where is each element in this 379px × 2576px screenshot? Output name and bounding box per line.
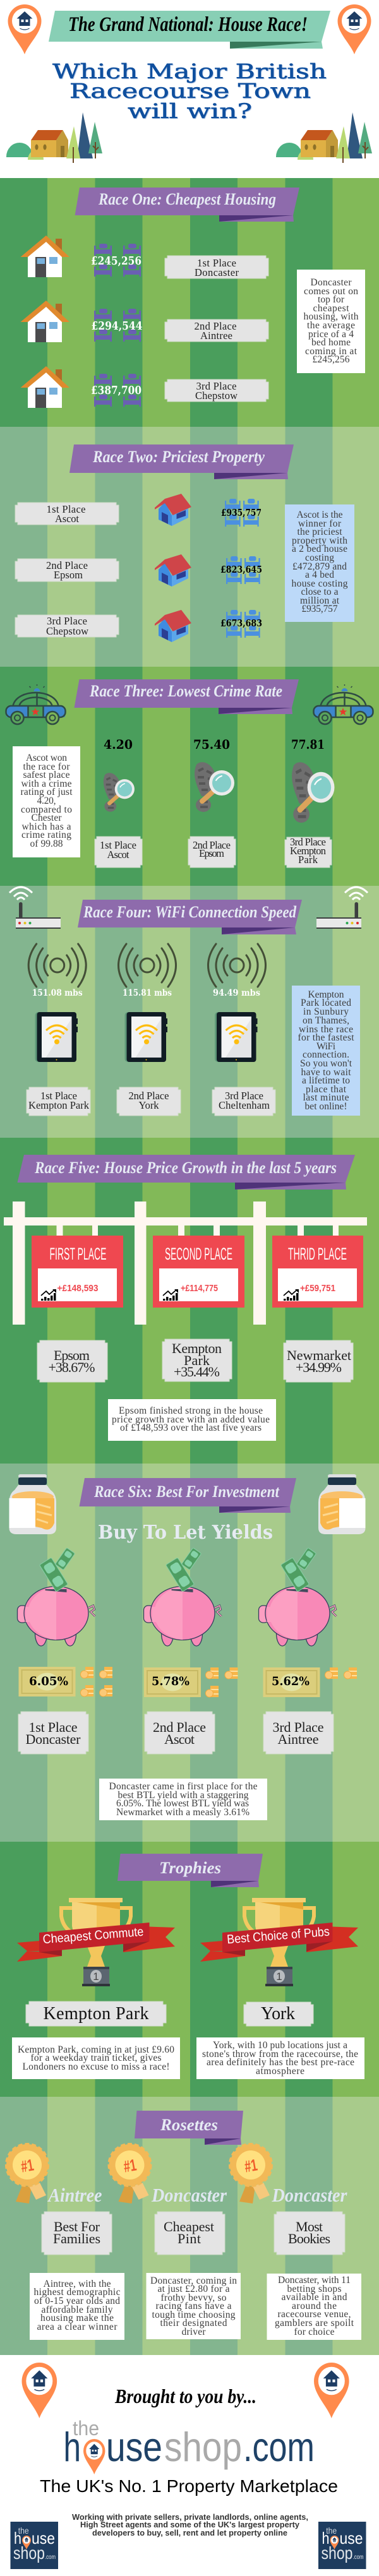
label: 2nd place Ascot: Ascot <box>164 1731 195 1747</box>
speed 2: 115.81 mbs <box>123 988 172 998</box>
icon: house 2 <box>20 301 69 342</box>
label: cheapest pint <box>155 2212 225 2255</box>
callout: Kempton Park: last minute <box>303 1092 349 1103</box>
callout: Kempton Park: on Thames, <box>303 1015 349 1026</box>
callout: Aintree <box>30 2273 124 2340</box>
banner: rosettes <box>135 2111 243 2145</box>
beds and price 3 <box>91 374 141 407</box>
rosette: Doncaster pint <box>109 2144 227 2206</box>
icon: left map pin <box>8 4 42 54</box>
callout: Kempton Park: have to wait <box>301 1067 351 1078</box>
callout: Ascot safest: of 99.88 <box>30 838 63 849</box>
label: 2nd place Epsom: Epsom <box>199 847 224 859</box>
callout: Doncaster bookies: gamblers are spoilt <box>275 2318 354 2329</box>
label: 2nd place Epsom <box>188 837 236 868</box>
icon: piggy bank 1 <box>18 1547 95 1646</box>
label: 1st place Doncaster: 1st Place <box>29 1719 77 1735</box>
callout: Kempton Park: connection. <box>303 1049 349 1060</box>
callout: York pubs: atmosphere <box>256 2066 304 2077</box>
beds and price 1: £935,757 <box>221 507 262 518</box>
logo: right square <box>318 2522 366 2569</box>
label: 3rd place Kempton Park: Park <box>298 854 318 866</box>
callout: Doncaster: cheapest <box>313 303 349 314</box>
beds and price 3: £387,700 <box>91 384 141 397</box>
label: 1st place Ascot: 1st Place <box>100 839 136 851</box>
icon: right village <box>276 112 372 163</box>
label: Newmarket: +34.99% <box>296 1359 342 1375</box>
rosette: Doncaster pint: Doncaster <box>151 2184 227 2206</box>
label: 3rd place Cheltenham <box>212 1087 275 1116</box>
callout: Ascot safest: with a crime <box>21 778 72 789</box>
callout: Doncaster yield: best BTL yield with a staggering <box>117 1790 249 1801</box>
label: 3rd place Chepstow: Chepstow <box>46 625 88 637</box>
yield 1: 6.05% <box>29 1674 68 1688</box>
icon: right router <box>316 887 368 929</box>
label: Kempton Park: Kempton Park <box>43 2004 149 2024</box>
callout: Ascot: costing <box>305 552 334 563</box>
panel: race three lowest crime rate <box>0 667 379 886</box>
banner: race five <box>18 1155 355 1190</box>
label: Newmarket: Newmarket <box>287 1347 351 1363</box>
icon: footprint and magnifier 1 <box>104 773 135 812</box>
rosette: Aintree <box>6 2144 102 2206</box>
label: 2nd place Aintree <box>165 319 268 342</box>
description: Working with private sellers, private landlords, online agents, <box>72 2513 308 2522</box>
callout: Kempton Park commute: for a weekday train ticket, gives <box>30 2053 162 2063</box>
callout: Doncaster pint: at just £2.80 for a <box>158 2284 230 2294</box>
callout: Doncaster: £245,256 <box>312 354 350 365</box>
callout: Kempton Park: wins the race <box>299 1024 353 1035</box>
speed 3: 94.49 mbs <box>213 988 260 998</box>
ribbon: best choice of pubs <box>200 1923 358 1962</box>
label: 1st place Kempton Park: 1st Place <box>40 1090 77 1102</box>
callout: Doncaster pint: tough time choosing <box>152 2310 236 2320</box>
label: 3rd place Kempton Park <box>285 836 332 868</box>
callout: Doncaster yield <box>99 1779 267 1820</box>
label: 1st place Doncaster: 1st Place <box>197 257 236 269</box>
callout: Aintree: Aintree, with the <box>43 2279 111 2289</box>
ribbon: cheapest commute: Cheapest Commute <box>42 1925 144 1947</box>
callout: Epsom: of £148,593 over the last five years <box>120 1422 262 1433</box>
callout: Doncaster bookies: available in and <box>282 2292 347 2303</box>
callout: Ascot: a 4 bed <box>305 569 334 580</box>
callout: Ascot: winner for <box>298 518 342 529</box>
beds and price 2 <box>91 309 143 342</box>
callout: Kempton Park: Park located <box>301 998 351 1008</box>
label: 2nd place Aintree: 2nd Place <box>195 320 236 332</box>
panel: trophies <box>0 1842 379 2097</box>
logo: right square: the <box>326 2525 337 2536</box>
icon: footprint and magnifier 2 <box>195 762 234 812</box>
icon: tablet 3 <box>215 1012 258 1062</box>
callout: Ascot: Ascot is the <box>297 510 343 520</box>
icon: piggy bank 3 <box>259 1547 336 1646</box>
label: Kempton Park <box>162 1339 232 1381</box>
label: Epsom: Epsom <box>54 1347 90 1363</box>
sign: second place: +£114,775 <box>181 1283 218 1294</box>
icon: right coin jar <box>318 1474 365 1534</box>
beds and price 1 <box>221 499 262 527</box>
icon: piggy bank 2 <box>144 1547 221 1646</box>
panel: race two priciest property <box>0 427 379 667</box>
label: Epsom: +38.67% <box>48 1359 95 1375</box>
panel: header <box>0 0 379 178</box>
logo: the house shop: shop <box>164 2424 242 2470</box>
callout: Kempton Park: place that <box>306 1084 347 1095</box>
label: Newmarket <box>284 1340 353 1382</box>
heading <box>52 59 327 123</box>
label: York <box>244 2002 313 2026</box>
icon: right map pin <box>314 2363 349 2418</box>
sign: first place: +£148,593 <box>57 1283 99 1294</box>
label: 3rd place Chepstow <box>15 615 119 637</box>
callout: Epsom: Epsom finished strong in the house <box>119 1405 263 1416</box>
beds and price 2: £823,645 <box>220 564 262 575</box>
label: cheapest pint: Cheapest <box>164 2219 214 2234</box>
callout: Ascot safest: crime rating <box>21 830 71 840</box>
logo: left square: use <box>32 2529 55 2548</box>
callout: Kempton Park commute: Kempton Park, coming in at just £9.60 <box>18 2044 174 2055</box>
banner: rosettes: Rosettes <box>160 2116 218 2134</box>
icon: house 2 <box>155 554 191 587</box>
tagline: The UK's No. 1 Property Marketplace <box>40 2476 338 2496</box>
brought to you by: Brought to you by... <box>114 2385 256 2407</box>
callout: Ascot <box>285 504 354 622</box>
icon: left coin jar <box>9 1474 56 1534</box>
label: most bookies <box>274 2212 345 2255</box>
label: 3rd place Cheltenham: 3rd Place <box>225 1090 263 1102</box>
label: Kempton Park: Kempton <box>172 1340 222 1356</box>
beds and price 3 <box>220 610 262 638</box>
banner: race five: Race Five: House Price Growth in the last 5 years <box>34 1159 337 1177</box>
callout: Ascot: million at <box>300 595 340 606</box>
callout: Doncaster: comes out on <box>304 286 358 297</box>
banner: race six: Race Six: Best For Investment <box>93 1482 280 1501</box>
banner: race four: Race Four: WiFi Connection Speed <box>83 903 297 921</box>
callout: Kempton Park <box>292 986 360 1116</box>
beds and price 2 <box>220 556 262 584</box>
callout: Kempton Park: in Sunbury <box>303 1006 349 1017</box>
callout: Ascot: £472,879 and <box>292 561 347 572</box>
rosette: Doncaster bookies <box>230 2144 347 2206</box>
callout: Ascot safest: compared to <box>21 804 72 815</box>
speed 2 <box>119 944 176 998</box>
label: Kempton Park: Park <box>184 1352 210 1368</box>
label: cheapest pint: Pint <box>177 2231 201 2246</box>
banner: race three: Race Three: Lowest Crime Rate <box>89 682 282 700</box>
icon: trophy cheapest commute <box>61 1898 131 1986</box>
icon: house 3 <box>155 610 191 642</box>
callout: Doncaster bookies: betting shops <box>287 2284 341 2294</box>
callout: Ascot safest: which has a <box>21 821 71 832</box>
logo: the house shop <box>63 2417 315 2474</box>
callout: Doncaster <box>297 270 365 373</box>
label: 3rd place Cheltenham: Cheltenham <box>219 1099 270 1111</box>
label: 3rd place Kempton Park: 3rd Place <box>290 836 326 848</box>
label: Kempton Park: +35.44% <box>174 1364 220 1380</box>
sign: first place: FIRST PLACE <box>49 1244 106 1263</box>
subheading: Buy To Let Yields <box>98 1522 273 1544</box>
yield 2 <box>144 1667 238 1697</box>
callout: Ascot safest: Ascot won <box>26 753 67 763</box>
callout: Doncaster: top for <box>318 294 345 305</box>
label: 3rd place Kempton Park: Kempton <box>290 845 326 857</box>
logo: left square <box>10 2522 58 2569</box>
label: most bookies: Most <box>296 2219 323 2234</box>
label: 2nd place York: 2nd Place <box>129 1090 169 1102</box>
callout: York pubs: York, with 10 pub locations just a <box>213 2040 347 2051</box>
logo: right square: shop <box>321 2543 352 2563</box>
icon: footprint and magnifier 3 <box>292 762 334 823</box>
callout: Doncaster: price of a 4 <box>308 329 354 340</box>
panel: race one cheapest housing <box>0 178 379 427</box>
callout: Ascot: the priciest <box>297 527 342 537</box>
icon: tablet 1 <box>35 1012 78 1062</box>
label: most bookies: Bookies <box>288 2231 330 2246</box>
speed 3 <box>208 944 265 998</box>
sign: second place: SECOND PLACE <box>165 1244 232 1263</box>
callout: Doncaster bookies: for choice <box>294 2327 335 2337</box>
label: 1st place Doncaster: Doncaster <box>195 266 239 278</box>
icon: house 1 <box>155 494 191 526</box>
sign: second place <box>153 1225 244 1308</box>
callout: Doncaster bookies: Doncaster, with 11 <box>278 2275 351 2286</box>
yield 3 <box>263 1667 357 1697</box>
callout: Aintree: highest demographic <box>34 2287 121 2298</box>
callout: Ascot: house costing <box>292 578 348 589</box>
callout: Ascot: a 2 bed house <box>292 544 347 554</box>
label: 3rd place Chepstow: Chepstow <box>195 390 238 402</box>
callout: Epsom <box>108 1399 276 1441</box>
title ribbon <box>49 11 330 49</box>
label: 2nd place Epsom: 2nd Place <box>46 559 88 571</box>
panel: footer <box>0 2355 379 2576</box>
panel: race four wifi connection speed <box>0 886 379 1138</box>
title ribbon: The Grand National: House Race! <box>68 13 308 36</box>
callout: York pubs <box>196 2037 364 2079</box>
label: 1st place Doncaster: Doncaster <box>25 1731 81 1747</box>
rosette: Aintree: Aintree <box>47 2184 102 2206</box>
icon: left map pin <box>21 2363 57 2418</box>
description: High Street agents and some of the UK's largest property <box>80 2520 299 2529</box>
label: 1st place Doncaster <box>18 1712 88 1754</box>
banner: race two: Race Two: Priciest Property <box>92 448 265 466</box>
panel: race six best for investment <box>0 1464 379 1842</box>
callout: Kempton Park: a lifetime to <box>302 1075 350 1086</box>
callout: Aintree: of 0-15 year olds and <box>34 2296 120 2306</box>
sign: first place <box>32 1225 123 1308</box>
callout: Doncaster pint: racing fans have a <box>155 2301 232 2311</box>
beds and price 1: £245,256 <box>91 254 141 268</box>
icon: house 3 <box>20 366 69 408</box>
callout: Aintree: area a clear winner <box>37 2322 117 2332</box>
icon: trophy best choice of pubs <box>244 1898 314 1986</box>
label: 2nd place Epsom: 2nd Place <box>193 839 231 851</box>
sign: third place <box>272 1225 363 1308</box>
banner: race four <box>78 900 302 934</box>
label: 1st place Doncaster <box>165 256 268 278</box>
label: 2nd place Epsom <box>15 559 119 581</box>
callout: Doncaster pint: their designated <box>160 2318 227 2329</box>
icon: left village <box>6 112 102 163</box>
callout: Doncaster: coming in at <box>305 346 358 357</box>
label: 1st place Ascot <box>95 837 142 868</box>
banner: race one <box>75 188 299 222</box>
label: 2nd place York <box>117 1087 181 1116</box>
label: 1st place Ascot: 1st Place <box>47 503 86 515</box>
logo: the house shop: use <box>106 2424 162 2470</box>
heading: will win? <box>128 99 252 123</box>
label: 3rd place Aintree: 3rd Place <box>273 1719 323 1735</box>
label: 2nd place Aintree: Aintree <box>200 330 232 342</box>
callout: Ascot safest <box>13 746 80 857</box>
callout: Doncaster bookies <box>267 2274 361 2340</box>
logo: left square: h <box>14 2529 21 2548</box>
banner: race one: Race One: Cheapest Housing <box>98 190 276 208</box>
rosette: Aintree: #1 <box>20 2155 35 2176</box>
callout: Doncaster: housing, with <box>303 311 359 322</box>
label: 3rd place Chepstow <box>165 379 268 402</box>
score: 75.40: 75.40 <box>193 737 230 752</box>
label: 3rd place Chepstow: 3rd Place <box>47 615 87 627</box>
logo: right square: h <box>322 2529 330 2548</box>
label: 3rd place Chepstow: 3rd Place <box>196 380 236 392</box>
ribbon: best choice of pubs: Best Choice of Pubs <box>226 1925 330 1947</box>
callout: Doncaster pint <box>147 2273 241 2339</box>
beds and price 2: £294,544 <box>91 319 143 333</box>
speed 1: 151.08 mbs <box>32 988 83 998</box>
callout: Kempton Park: So you won't <box>300 1058 352 1069</box>
callout: Ascot safest: the race for <box>23 761 70 772</box>
banner: race three <box>75 679 299 714</box>
logo: left square: the <box>18 2525 29 2536</box>
rosette: Doncaster pint: #1 <box>122 2155 138 2176</box>
callout: Doncaster bookies: around the <box>292 2301 337 2311</box>
rosette: Doncaster bookies: #1 <box>243 2155 259 2176</box>
callout: Doncaster pint: driver <box>182 2327 206 2337</box>
label: 2nd place Epsom: Epsom <box>54 569 83 581</box>
callout: Kempton Park: for the fastest <box>298 1032 354 1043</box>
icon: house 1 <box>20 236 69 277</box>
label: best for families: Families <box>53 2231 100 2246</box>
heading: Racecourse Town <box>69 79 311 103</box>
callout: Doncaster pint: frothy bevvy, so <box>160 2293 227 2303</box>
label: 3rd place Aintree: Aintree <box>278 1731 318 1747</box>
callout: Ascot safest: 4.20, <box>37 796 56 806</box>
rosette: Doncaster bookies: Doncaster <box>272 2184 347 2206</box>
description <box>72 2513 308 2537</box>
label: best for families: Best For <box>54 2219 100 2234</box>
callout: York pubs: area definitely has the best pre-race <box>207 2057 354 2068</box>
callout: Ascot safest: safest place <box>23 770 70 780</box>
callout: Doncaster: the average <box>307 320 355 331</box>
logo: left square: shop <box>13 2543 45 2563</box>
callout: Kempton Park commute <box>12 2037 180 2079</box>
callout: Ascot safest: rating of just <box>20 787 73 797</box>
icon: left police car <box>6 684 66 724</box>
callout: Doncaster: bed home <box>311 337 351 348</box>
label: 1st place Ascot: Ascot <box>107 849 129 861</box>
callout: Ascot: property with <box>292 535 347 546</box>
label: 1st place Kempton Park <box>27 1087 90 1116</box>
label: York: York <box>261 2004 295 2024</box>
score: 4.20: 4.20 <box>104 737 133 752</box>
panel: rosettes <box>0 2097 379 2355</box>
label: Epsom <box>37 1340 107 1382</box>
icon: right police car <box>313 684 373 724</box>
label: 1st place Ascot <box>15 503 119 525</box>
heading: Which Major British <box>52 59 327 83</box>
banner: trophies <box>117 1854 263 1887</box>
callout: Doncaster bookies: racecourse venue, <box>278 2309 351 2320</box>
callout: Kempton Park: Kempton <box>308 989 344 1000</box>
logo: right square: use <box>340 2529 363 2548</box>
callout: Aintree: housing make the <box>40 2313 114 2323</box>
icon: left router <box>9 887 61 929</box>
label: 1st place Ascot: Ascot <box>55 513 79 525</box>
callout: Kempton Park: bet online! <box>304 1101 347 1112</box>
ribbon: cheapest commute <box>17 1923 175 1962</box>
score: 77.81: 77.81 <box>291 737 325 752</box>
label: 1st place Kempton Park: Kempton Park <box>28 1099 90 1111</box>
fence <box>4 1202 367 1325</box>
callout: Doncaster: Doncaster <box>311 277 352 288</box>
icon: tablet 2 <box>125 1012 167 1062</box>
callout: Epsom: price growth race with an added value <box>112 1414 270 1425</box>
label: 2nd place York: York <box>139 1099 159 1111</box>
yield 1 <box>19 1667 112 1696</box>
yield 2: 5.78% <box>152 1674 190 1688</box>
callout: York pubs: stone's throw from the racecourse, the <box>202 2049 358 2060</box>
label: 2nd place Ascot: 2nd Place <box>153 1719 206 1735</box>
callout: Ascot: close to a <box>301 587 339 597</box>
panel: race five house price growth <box>0 1138 379 1464</box>
callout: Ascot safest: Chester <box>32 813 62 823</box>
logo: the house shop: h <box>63 2424 81 2470</box>
logo: left square: .com <box>45 2554 56 2561</box>
label: 2nd place Ascot <box>145 1712 215 1754</box>
label: Kempton Park <box>26 2001 166 2026</box>
speed 1 <box>28 944 86 998</box>
callout: Doncaster pint: Doncaster, coming in <box>150 2275 237 2286</box>
sign: third place: +£59,751 <box>300 1283 335 1294</box>
logo: the house shop: the <box>73 2417 99 2440</box>
callout: Doncaster yield: Doncaster came in first place for the <box>109 1781 258 1792</box>
banner: race six <box>80 1478 296 1513</box>
description: developers to buy, sell, rent and let property online <box>92 2529 287 2537</box>
label: best for families <box>42 2212 112 2255</box>
callout: Aintree: affordable family <box>42 2305 113 2315</box>
banner: race two <box>69 444 294 479</box>
beds and price 3: £673,683 <box>220 617 262 629</box>
logo: right square: .com <box>352 2554 364 2561</box>
callout: Kempton Park: WiFi <box>316 1041 336 1052</box>
label: 3rd place Aintree <box>263 1712 334 1754</box>
icon: right map pin <box>337 4 371 54</box>
callout: Doncaster yield: Newmarket with a measly 3.61% <box>116 1807 250 1818</box>
beds and price 1 <box>91 244 141 277</box>
logo: the house shop: .com <box>243 2424 315 2470</box>
callout: Doncaster yield: 6.05%. The lowest BTL yield was <box>116 1798 249 1809</box>
callout: Ascot: £935,757 <box>302 604 338 614</box>
yield 3: 5.62% <box>272 1674 310 1688</box>
callout: Kempton Park commute: Londoners no excuse to miss a race! <box>23 2061 169 2072</box>
banner: trophies: Trophies <box>159 1859 221 1877</box>
